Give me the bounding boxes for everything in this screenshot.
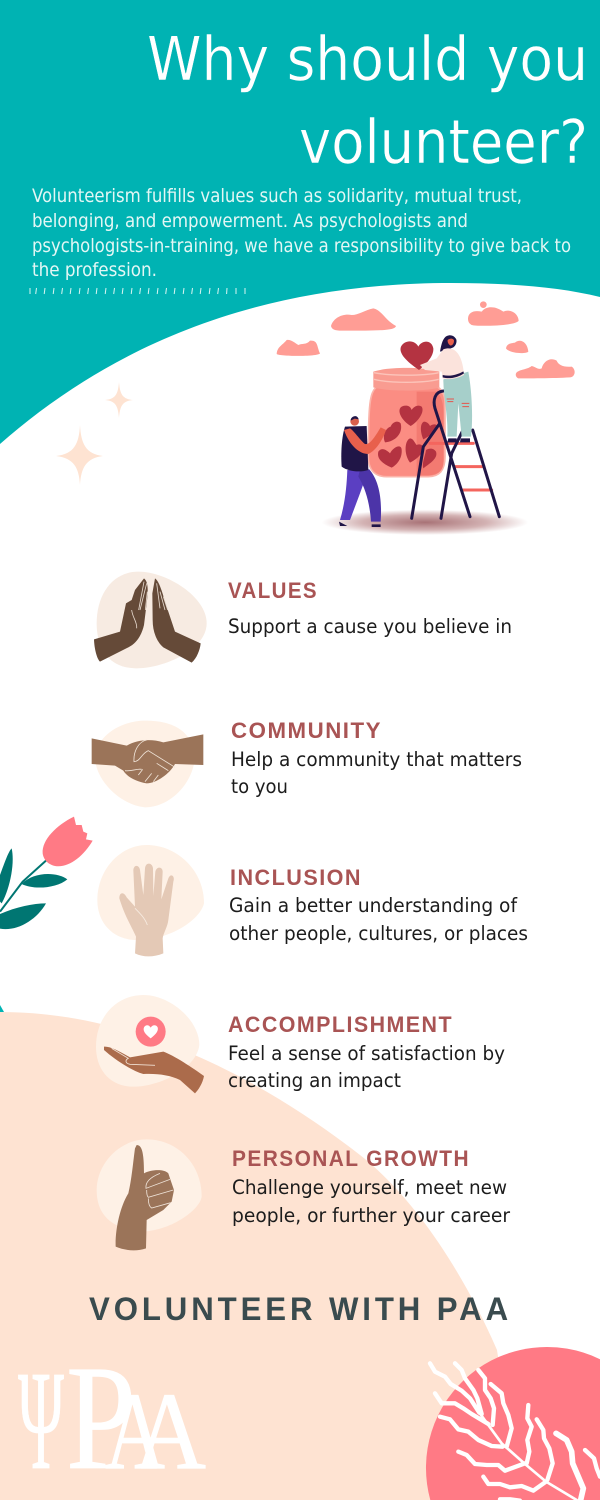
text: personal growth: people, or further your career — [232, 1204, 511, 1227]
text: inclusion: Gain a better understanding of — [229, 894, 518, 917]
item: personal growth — [97, 1139, 511, 1250]
icon: thumbs up — [97, 1139, 202, 1250]
item: inclusion — [97, 845, 528, 956]
text: personal growth — [232, 1176, 511, 1227]
logo: PAA: A — [105, 1370, 165, 1492]
item: values — [94, 572, 512, 668]
heading: community: COMMUNITY — [231, 718, 382, 743]
heading: inclusion: INCLUSION — [230, 865, 362, 890]
text: accomplishment: creating an impact — [228, 1069, 401, 1092]
text: community — [231, 748, 522, 798]
title — [147, 24, 588, 178]
illustration: volunteers filling a heart jar — [277, 301, 575, 535]
panel: peach bottom background — [0, 1012, 520, 1500]
jar — [368, 368, 445, 477]
heading: accomplishment: ACCOMPLISHMENT — [228, 1012, 453, 1037]
item: community — [92, 718, 522, 807]
intro text block: belonging, and empowerment. As psychologists and — [32, 211, 468, 232]
text: accomplishment: Feel a sense of satisfaction by — [228, 1042, 505, 1065]
call to action: VOLUNTEER WITH PAA — [89, 1291, 512, 1327]
intro text block — [32, 186, 571, 281]
illustration: tulip — [0, 817, 93, 929]
panel: teal header background — [0, 0, 600, 444]
icon: praying hands — [94, 572, 207, 668]
logo: PAA: P — [66, 1335, 136, 1500]
woman — [420, 335, 472, 442]
text: inclusion — [229, 894, 528, 945]
icon: hand with heart — [96, 995, 204, 1093]
man — [339, 416, 386, 527]
ladder — [412, 391, 499, 518]
decoration: white leaf branch — [430, 1363, 600, 1500]
text: community: Help a community that matters — [231, 748, 522, 771]
icon: handshake — [92, 721, 203, 807]
icon: raised hand — [97, 845, 204, 956]
intro text block: the profession. — [32, 260, 157, 281]
text: inclusion: other people, cultures, or places — [229, 922, 528, 945]
icon: sparkles — [56, 382, 133, 485]
heading: personal growth: PERSONAL GROWTH — [232, 1146, 470, 1171]
text: values: Support a cause you believe in — [228, 615, 512, 638]
item: accomplishment — [96, 995, 505, 1093]
heading: values: VALUES — [228, 578, 318, 603]
small teal corner — [0, 1005, 4, 1012]
logo: PAA — [18, 1335, 206, 1500]
decoration: coral circle — [426, 1347, 600, 1500]
text: accomplishment — [228, 1042, 505, 1092]
text: personal growth: Challenge yourself, meet new — [232, 1176, 507, 1199]
logo: PAA: Ψ — [18, 1341, 64, 1499]
falling heart — [401, 341, 433, 370]
intro text block: Volunteerism fulfills values such as solidarity, mutual trust, — [32, 186, 522, 207]
text: community: to you — [231, 775, 288, 798]
logo: PAA: A — [134, 1370, 206, 1492]
